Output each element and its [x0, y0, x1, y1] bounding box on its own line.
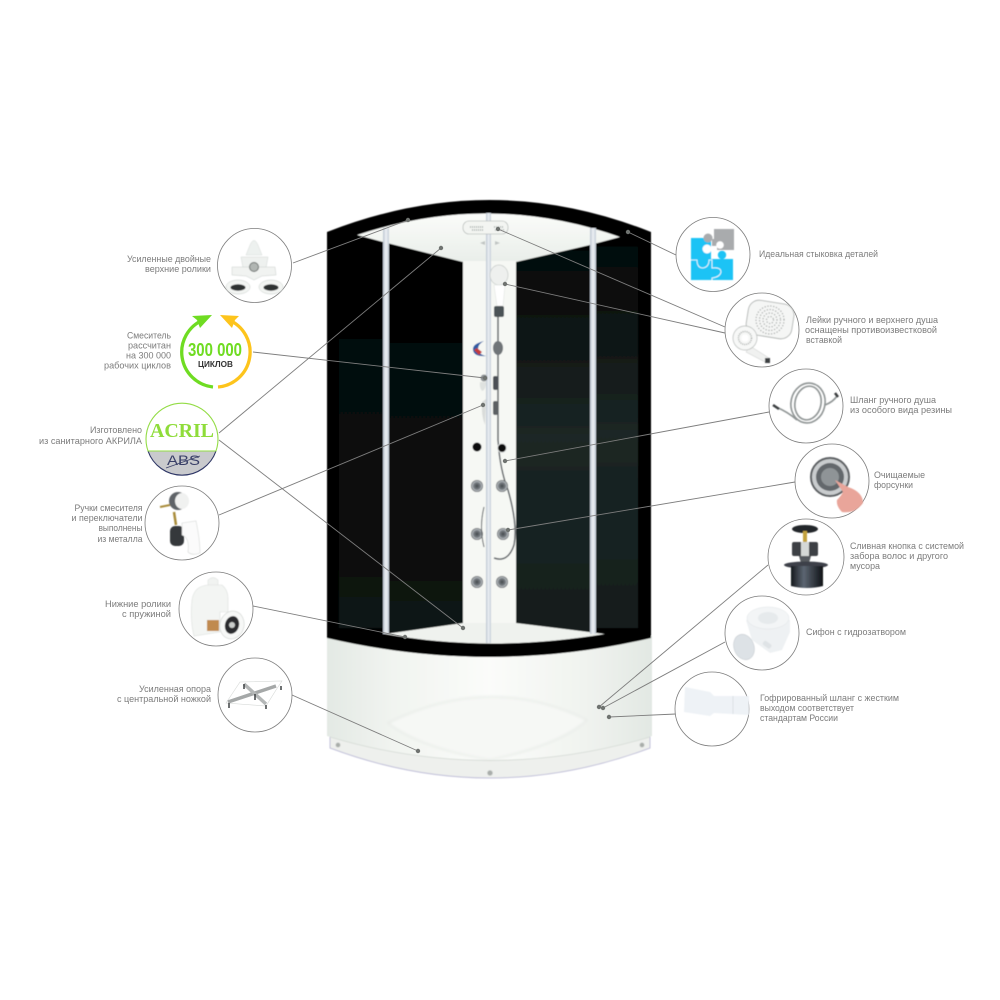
text: cleanable nozzle: форсунки [874, 480, 913, 491]
text: siphon: Сифон с гидрозатвором [806, 627, 906, 638]
text: mixer cycles: Смеситель [127, 330, 171, 342]
text: cleanable nozzle [874, 470, 925, 491]
text: support frame [117, 684, 212, 705]
text: drain button [850, 541, 964, 572]
icon: acrylic ABS: ABS [167, 452, 200, 468]
text: lower rollers: Нижние ролики [105, 599, 171, 610]
icon: cleanable nozzle [795, 444, 869, 518]
body jets [471, 442, 509, 588]
icon: acrylic ABS: ACRIL [150, 420, 214, 442]
text: support frame: Усиленная опора [139, 684, 212, 695]
text: mixer cycles: на 300 000 [126, 350, 171, 362]
text: drain button: забора волос и другого [850, 551, 948, 562]
tub [327, 636, 652, 778]
centre panel [463, 261, 516, 626]
icon: mixer handles [145, 486, 219, 560]
icon: shower heads [725, 293, 799, 367]
text: lower rollers: с пружиной [122, 609, 171, 620]
icon: support frame [218, 658, 292, 732]
text: hand shower hose: Шланг ручного душа [850, 395, 937, 406]
text: mixer handles: из металла [98, 534, 143, 545]
text: mixer handles [72, 503, 143, 545]
text: mixer handles: выполнены [98, 523, 143, 534]
shower tray [385, 623, 605, 644]
icon: hand shower hose [769, 369, 843, 443]
text: shower heads: оснащены противоизвестковой [805, 325, 937, 336]
text: corrugated hose [760, 693, 899, 724]
mixer handles [480, 374, 498, 425]
text: mixer handles: Ручки смесителя [74, 503, 142, 514]
text: acrylic: Изготовлено [90, 425, 142, 436]
text: support frame: с центральной ножкой [117, 694, 211, 705]
text: corrugated hose: стандартам России [760, 713, 838, 724]
text: hand shower hose [850, 395, 952, 416]
shower cabin [327, 200, 652, 778]
text: top rollers: Усиленные двойные [127, 254, 211, 265]
text: shower heads: вставкой [806, 335, 842, 346]
hand shower [490, 265, 508, 317]
icon: 300 000 cycles [182, 315, 250, 387]
text: drain button: мусора [850, 561, 881, 572]
hose [494, 317, 515, 559]
text: top rollers [127, 254, 211, 275]
icon: 300 000 cycles: 300 000 [188, 340, 242, 360]
overhead shower [463, 221, 508, 245]
icon: double top rollers [218, 228, 292, 302]
text: mixer handles: и переключатели [72, 513, 142, 524]
text: drain button: Сливная кнопка с системой [850, 541, 964, 552]
control display [473, 341, 503, 356]
text: mixer cycles [104, 330, 171, 372]
icon: puzzle [676, 218, 750, 292]
icon: corrugated hose [675, 672, 749, 746]
text: corrugated hose: Гофрированный шланг с жестким [760, 693, 899, 704]
text: hand shower hose: из особого вида резины [850, 405, 952, 416]
text: shower heads [805, 315, 939, 346]
leader lines [219, 220, 795, 751]
text: corrugated hose: выходом соответствует [760, 703, 855, 714]
black frame and back panels [327, 200, 651, 657]
ceiling [357, 213, 620, 262]
icon: drain button [768, 519, 844, 595]
text: mixer cycles: рабочих циклов [104, 360, 171, 372]
icon: acrylic ABS [146, 403, 218, 475]
text: cleanable nozzle: Очищаемые [874, 470, 925, 481]
text: shower heads: Лейки ручного и верхнего душа [806, 315, 939, 326]
text: acrylic: из санитарного АКРИЛА [39, 436, 143, 447]
text: mixer cycles: рассчитан [128, 340, 171, 352]
icon: 300 000 cycles: ЦИКЛОВ [198, 359, 233, 369]
icon: lower rollers [179, 572, 253, 646]
tub screws [336, 742, 644, 776]
icon: siphon [725, 596, 799, 670]
text: top rollers: верхние ролики [145, 264, 211, 275]
text: acrylic [39, 425, 143, 447]
leader dots [403, 218, 630, 753]
text: puzzle: Идеальная стыковка деталей [759, 249, 878, 260]
text: lower rollers [105, 599, 171, 620]
door profiles [383, 213, 596, 643]
